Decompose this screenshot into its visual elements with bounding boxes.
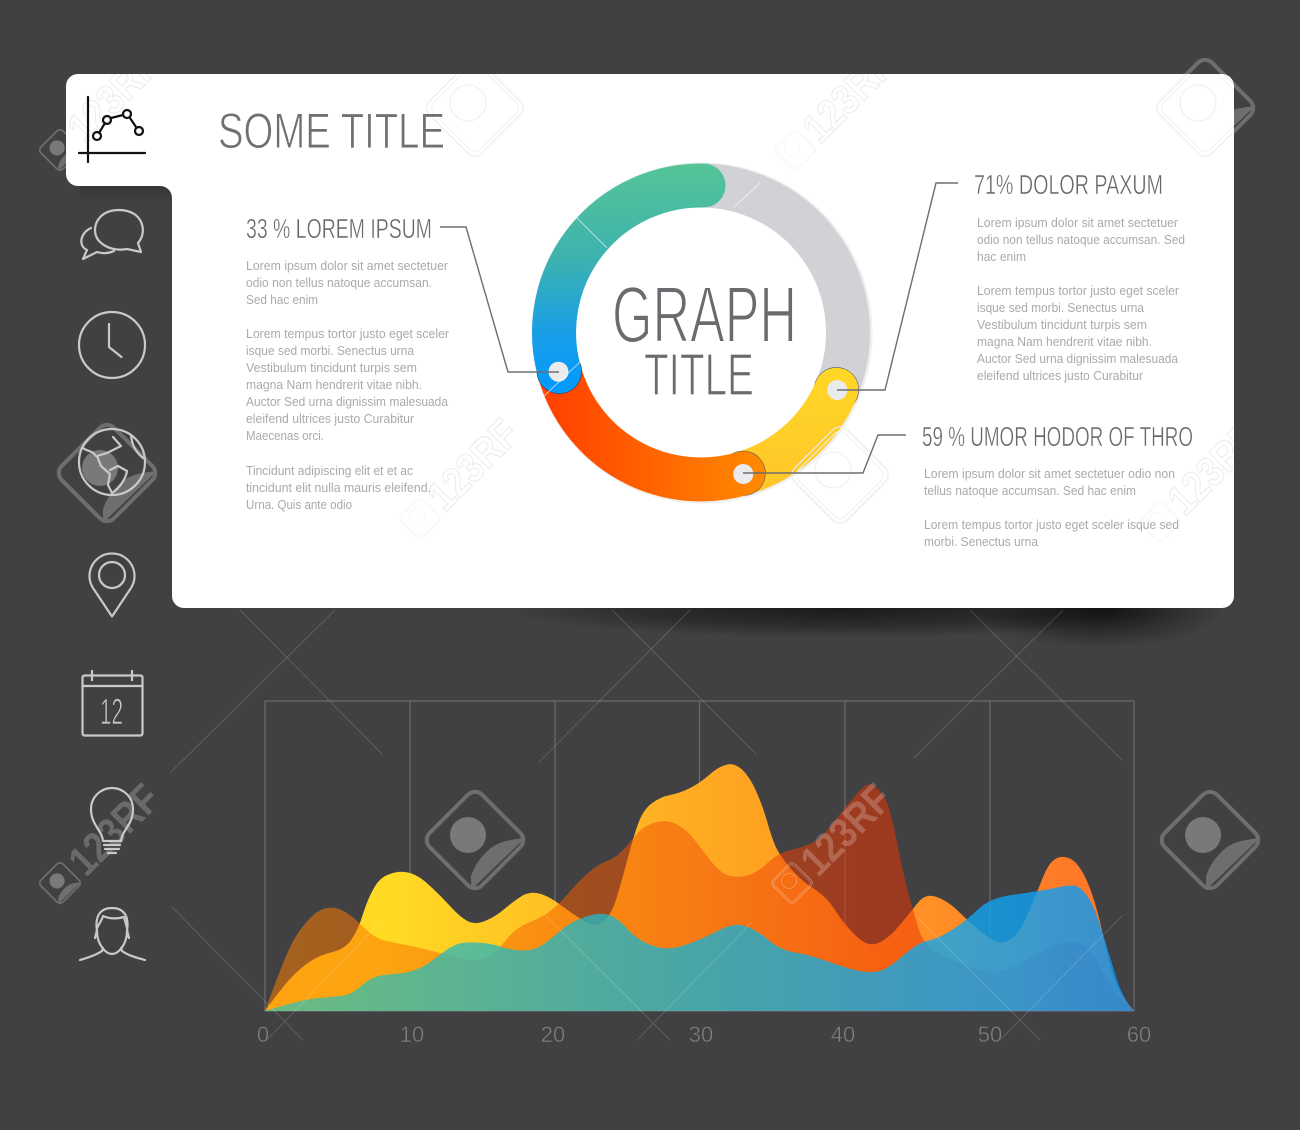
- text block: 33% lorem ipsum: Lorem tempus tortor justo eget sceler: [246, 326, 450, 341]
- text block: 71% dolor paxum: Lorem ipsum dolor sit amet sectetuer: [977, 215, 1179, 230]
- callout dot: orange: [733, 464, 753, 484]
- text block: 71% dolor paxum: isque sed morbi. Senectus urna: [977, 300, 1145, 315]
- text block: 71% dolor paxum: odio non tellus natoque accumsan. Sed: [977, 232, 1185, 247]
- axis labels: 60: [1127, 1022, 1151, 1047]
- text block: 71% dolor paxum: Lorem tempus tortor justo eget sceler: [977, 283, 1180, 298]
- axis labels: 10: [400, 1022, 424, 1047]
- text block: 71% dolor paxum: hac enim: [977, 249, 1026, 264]
- axis labels: 40: [831, 1022, 855, 1047]
- text block: 59% umor hodor of thro: [922, 421, 1193, 549]
- series: dark orange to red: [265, 784, 1134, 1011]
- watermark hairlines on donut: [543, 183, 760, 397]
- text block: 59% umor hodor of thro: tellus natoque accumsan. Sed hac enim: [924, 483, 1136, 498]
- text block: 59% umor hodor of thro: Lorem tempus tortor justo eget sceler isque sed: [924, 517, 1179, 532]
- tab shadow under active tab: [80, 186, 172, 204]
- text block: 71% dolor paxum: [974, 169, 1185, 383]
- icon: map pin: [89, 553, 134, 616]
- text block: 33% lorem ipsum: magna Nam hendrerit vitae nibh.: [246, 377, 422, 392]
- text block: 33% lorem ipsum: eleifend ultrices justo Curabitur: [246, 411, 415, 426]
- icon: clock: [79, 312, 145, 378]
- text block: 33% lorem ipsum: [246, 213, 450, 512]
- segment: blue to green: [537, 185, 704, 394]
- text block: 33% lorem ipsum: Urna. Quis ante odio: [246, 497, 352, 512]
- title: SOME TITLE: [218, 103, 445, 159]
- segment: orange: [559, 371, 766, 496]
- series: teal to blue: [265, 885, 1134, 1011]
- icon: light bulb: [91, 788, 133, 853]
- text block: 33% lorem ipsum: isque sed morbi. Senectus urna: [246, 343, 415, 358]
- area chart grid: [265, 701, 1134, 1011]
- watermark over chart: [770, 775, 901, 905]
- text block: 33% lorem ipsum: Vestibulum tincidunt turpis sem: [246, 360, 417, 375]
- watermark on white panel: [58, 42, 1268, 544]
- icon: calendar: [82, 670, 142, 736]
- icon: person: [80, 908, 145, 960]
- icon: speech bubbles: [81, 210, 143, 259]
- watermark on white panel: 123RF: [1158, 414, 1268, 523]
- icon: globe: [79, 429, 145, 495]
- text block: 33% lorem ipsum: Maecenas orci.: [246, 428, 324, 443]
- text block: 33% lorem ipsum: 33 % LOREM IPSUM: [246, 213, 432, 244]
- watermark on dark background: [38, 56, 1262, 905]
- text block: 33% lorem ipsum: Lorem ipsum dolor sit amet sectetuer: [246, 258, 449, 273]
- icon: calendar: 12: [100, 691, 123, 732]
- text block: 71% dolor paxum: Auctor Sed urna dignissim malesuada: [977, 351, 1179, 366]
- segment: grey remainder: [690, 185, 848, 390]
- watermark on white panel: 123RF: [418, 410, 528, 519]
- callout dot: yellow: [827, 380, 847, 400]
- watermark on dark background: 123RF: [59, 775, 169, 884]
- area chart: [265, 764, 1134, 1011]
- text block: 71% dolor paxum: eleifend ultrices justo Curabitur: [977, 368, 1144, 383]
- watermark on white panel: 123RF: [793, 42, 903, 151]
- callout lines: [440, 183, 958, 473]
- graph title: GRAPH: [612, 270, 797, 359]
- text block: 33% lorem ipsum: odio non tellus natoque accumsan.: [246, 275, 432, 290]
- icon: line chart (active tab): [79, 97, 145, 162]
- axis labels: 50: [978, 1022, 1002, 1047]
- text block: 59% umor hodor of thro: morbi. Senectus urna: [924, 534, 1039, 549]
- callout dot: blue: [548, 362, 568, 382]
- watermark hairlines on dark background: [170, 610, 1123, 1040]
- text block: 59% umor hodor of thro: Lorem ipsum dolor sit amet sectetuer odio non: [924, 466, 1175, 481]
- graph title: TITLE: [644, 342, 754, 408]
- series: yellow to orange: [265, 764, 1134, 1011]
- axis labels: 0: [257, 1022, 269, 1047]
- panel drop shadow: [500, 572, 1225, 648]
- axis labels: 30: [689, 1022, 713, 1047]
- axis labels: 20: [541, 1022, 565, 1047]
- text block: 33% lorem ipsum: Auctor Sed urna dignissim malesuada: [246, 394, 449, 409]
- watermark on white panel: 123RF: [58, 42, 168, 151]
- text block: 33% lorem ipsum: Tincidunt adipiscing elit et et ac: [246, 463, 413, 478]
- segment: yellow: [743, 367, 859, 473]
- axis labels: [257, 1022, 1151, 1047]
- graph title: [612, 270, 797, 408]
- panel: white card with tab: [66, 74, 1234, 608]
- text block: 33% lorem ipsum: tincidunt elit nulla mauris eleifend.: [246, 480, 431, 495]
- text block: 71% dolor paxum: magna Nam hendrerit vitae nibh.: [977, 334, 1152, 349]
- watermark over chart: 123RF: [791, 775, 901, 884]
- donut chart: [533, 164, 871, 502]
- watermark egg over donut: [788, 423, 892, 527]
- text block: 33% lorem ipsum: Sed hac enim: [246, 292, 318, 307]
- text block: 71% dolor paxum: 71% DOLOR PAXUM: [974, 169, 1163, 200]
- text block: 71% dolor paxum: Vestibulum tincidunt turpis sem: [977, 317, 1147, 332]
